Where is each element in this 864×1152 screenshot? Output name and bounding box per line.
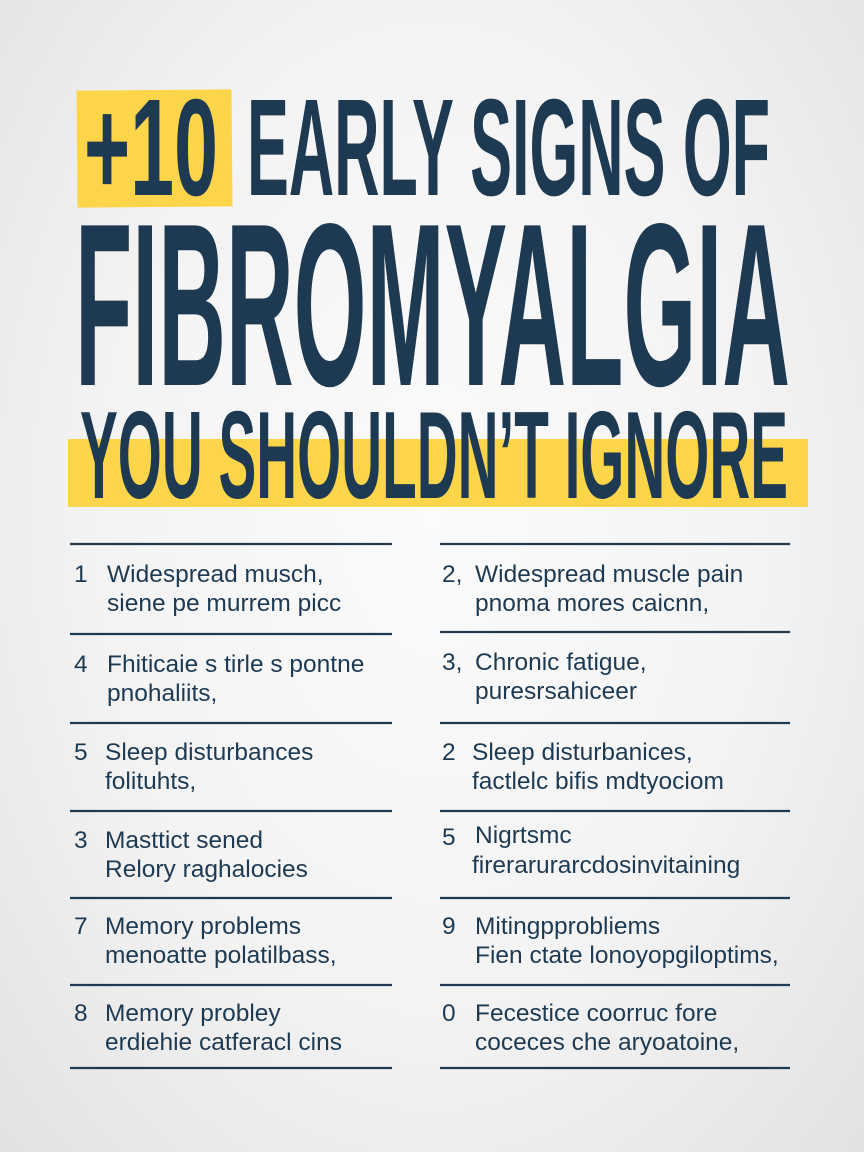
- item 0: Fecestice coorruc fore: [475, 1000, 717, 1027]
- item 3 right: puresrsahiceer: [475, 678, 637, 705]
- list: left column: [70, 544, 392, 1068]
- item 5: Sleep disturbances: [105, 739, 313, 766]
- item 7: Memory problems: [105, 913, 301, 940]
- item 1: 1: [74, 561, 88, 588]
- title line 1: +10: [84, 71, 218, 225]
- item 4: [74, 651, 364, 707]
- item 0: 0: [442, 1000, 456, 1027]
- item 7: 7: [74, 913, 88, 940]
- item 4: Fhiticaie s tirle s pontne: [107, 651, 364, 678]
- title line 1: [84, 71, 770, 225]
- item 3: 3: [74, 827, 88, 854]
- item 9: 9: [442, 913, 456, 940]
- item 3: Relory raghalocies: [105, 856, 308, 883]
- item 0: coceces che aryoatoine,: [475, 1029, 739, 1056]
- list: right column: [440, 544, 790, 1068]
- item 8: Memory probley: [105, 1000, 281, 1027]
- item 9: Mitingpprobliems: [475, 913, 660, 940]
- title: [68, 71, 808, 525]
- item 7: menoatte polatilbass,: [105, 942, 337, 969]
- item 5 right: firerarurarcdosinvitaining: [472, 852, 740, 879]
- item 2: [442, 561, 743, 617]
- item 5 right: 5: [442, 824, 456, 851]
- item 8: 8: [74, 1000, 88, 1027]
- item 4: pnohaliits,: [107, 680, 217, 707]
- item 2: pnoma mores caicnn,: [475, 590, 709, 617]
- item 3 right: 3,: [442, 649, 462, 676]
- item 9: Fien ctate lonoyopgiloptims,: [475, 942, 779, 969]
- item 2: 2,: [442, 561, 462, 588]
- item 5: folituhts,: [105, 768, 196, 795]
- item 8: [74, 1000, 342, 1056]
- item 5 right: [442, 822, 740, 879]
- item 2 right: [442, 739, 724, 795]
- item 5: 5: [74, 739, 88, 766]
- item 4: 4: [74, 651, 88, 678]
- highlight: +10: [76, 89, 233, 208]
- item 3 right: [442, 649, 647, 705]
- item 5: [74, 739, 313, 795]
- item 2 right: Sleep disturbanices,: [472, 739, 693, 766]
- highlight bar: [68, 439, 808, 507]
- item 7: [74, 913, 337, 969]
- item 8: erdiehie catferacl cins: [105, 1029, 342, 1056]
- item 9: [442, 913, 779, 969]
- item 3: [74, 827, 308, 883]
- item 2 right: factlelc bifis mdtyociom: [472, 768, 724, 795]
- item 1: Widespread musch,: [107, 561, 324, 588]
- item 5 right: Nigrtsmc: [475, 822, 572, 849]
- item 3 right: Chronic fatigue,: [475, 649, 647, 676]
- item 0: [442, 1000, 739, 1056]
- item 2 right: 2: [442, 739, 456, 766]
- item 2: Widespread muscle pain: [475, 561, 743, 588]
- item 3: Masttict sened: [105, 827, 263, 854]
- item 1: siene pe murrem picc: [107, 590, 341, 617]
- item 1: [74, 561, 341, 617]
